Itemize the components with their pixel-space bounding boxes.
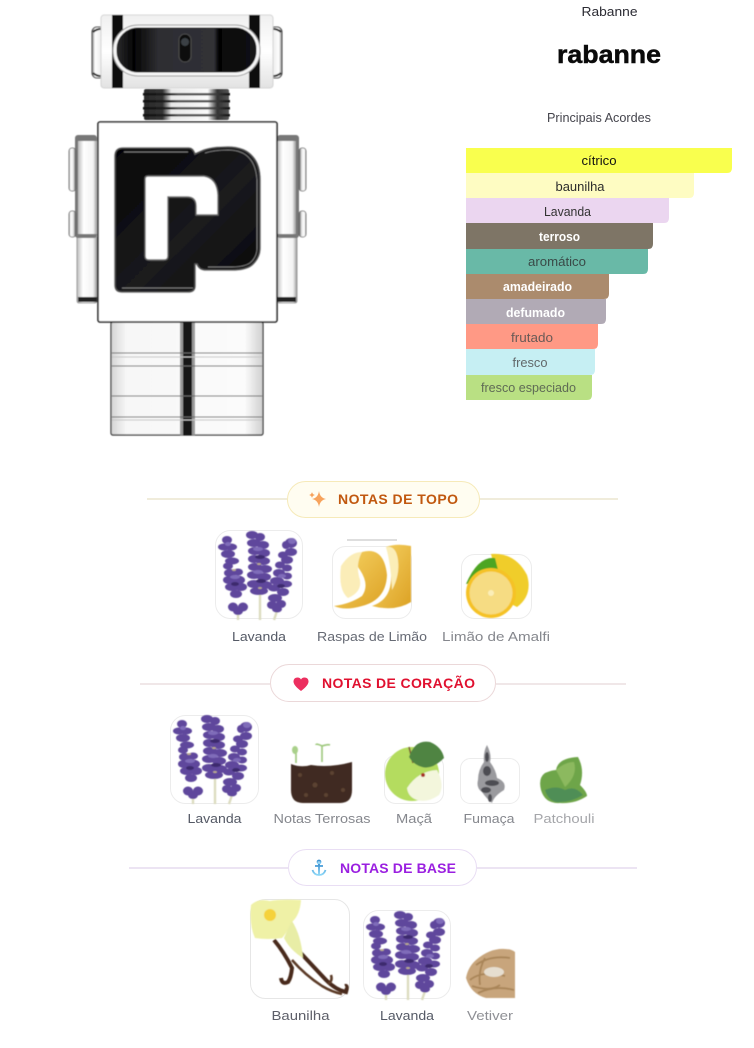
bottle legs	[111, 322, 263, 435]
section: top notes	[147, 482, 618, 644]
accord: defumado: defumado	[506, 306, 565, 320]
accord: baunilha: baunilha	[556, 180, 605, 194]
section: heart notes	[140, 664, 626, 826]
note: notas terrosas: Notas Terrosas	[274, 811, 371, 826]
brand name: Rabanne	[582, 4, 638, 19]
accord: fresco especiado	[466, 375, 592, 400]
note: baunilha	[250, 900, 350, 1023]
note: raspas de limao: Raspas de Limão	[317, 629, 427, 644]
bottle ears	[92, 27, 282, 78]
note: lavanda	[170, 715, 258, 826]
perfume bottle: robot	[69, 15, 306, 435]
note: limao de amalfi: Limão de Amalfi	[442, 629, 550, 644]
note: maca	[384, 742, 444, 826]
accord: defumado	[466, 299, 606, 324]
accord: citrico: cítrico	[582, 154, 617, 168]
note: patchouli: Patchouli	[534, 811, 595, 826]
accord: frutado	[466, 324, 598, 349]
accord: terroso: terroso	[539, 230, 580, 244]
icon: anchor	[312, 860, 326, 875]
accord: fresco	[466, 349, 595, 375]
note: lavanda: Lavanda	[380, 1008, 435, 1023]
heading pill: notas de base	[288, 850, 476, 886]
accord: terroso	[466, 223, 653, 249]
bottle neck	[143, 89, 230, 120]
note: lavanda	[216, 530, 302, 644]
note: raspas de limao	[317, 540, 427, 644]
bottle head	[101, 15, 273, 88]
section: base notes	[129, 850, 637, 1023]
accord: Lavanda	[466, 198, 669, 223]
icon: heart	[293, 678, 309, 691]
heading pill: notas de coracao	[270, 664, 496, 702]
brand logo: rabanne	[557, 41, 661, 69]
note: lavanda: Lavanda	[232, 629, 287, 644]
heading pill: notas de topo	[288, 482, 480, 518]
note: limao de amalfi	[442, 554, 550, 644]
accord: fresco: fresco	[512, 356, 548, 370]
accord: frutado: frutado	[511, 331, 553, 345]
note: baunilha: Baunilha	[272, 1008, 330, 1023]
bottle arms	[69, 135, 306, 303]
note: vetiver: Vetiver	[467, 1008, 514, 1023]
note: notas terrosas	[274, 744, 371, 826]
accord: aromatico	[466, 249, 648, 274]
bottle body	[98, 122, 277, 322]
note: fumaca	[460, 745, 520, 826]
P logo	[115, 147, 260, 292]
accord: citrico	[466, 148, 732, 173]
accord: Lavanda: Lavanda	[544, 205, 591, 219]
accord: fresco especiado: fresco especiado	[481, 381, 576, 395]
note: patchouli	[534, 757, 595, 826]
heading pill: notas de base: NOTAS DE BASE	[340, 860, 456, 876]
accord: amadeirado	[466, 274, 609, 299]
main accords bar chart	[466, 148, 732, 400]
note: lavanda	[364, 910, 450, 1023]
accord: aromatico: aromático	[528, 255, 586, 269]
icon: sparkles	[309, 491, 326, 507]
accord: baunilha	[466, 173, 694, 198]
heading pill: notas de coracao: NOTAS DE CORAÇÃO	[322, 674, 475, 691]
accords heading: Principais Acordes	[547, 111, 651, 125]
note: lavanda: Lavanda	[188, 811, 242, 826]
accord: amadeirado: amadeirado	[503, 280, 572, 294]
note: maca: Maçã	[396, 811, 433, 826]
note: fumaca: Fumaça	[464, 811, 515, 826]
heading pill: notas de topo: NOTAS DE TOPO	[338, 491, 458, 507]
note: vetiver	[466, 949, 515, 1023]
